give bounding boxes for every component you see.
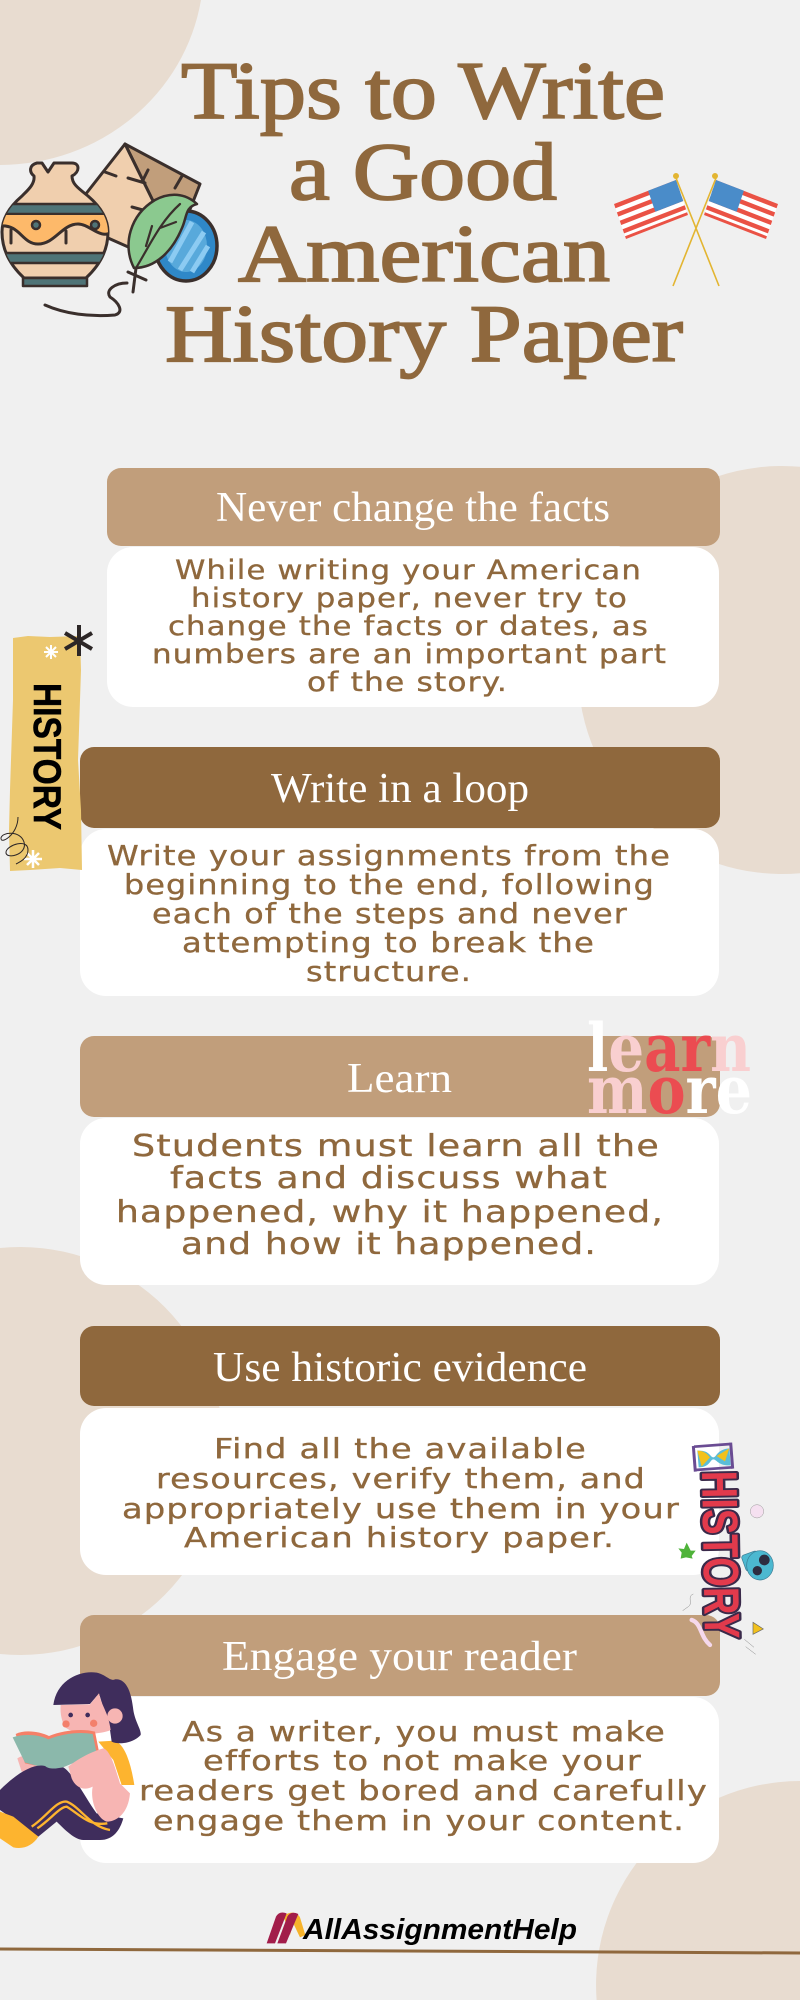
title: American — [238, 208, 610, 299]
panel: write in a loop — [80, 747, 720, 996]
heading: use historic evidence: Use historic evidence — [213, 1345, 587, 1391]
panel: use historic evidence — [80, 1326, 720, 1575]
text: write in a loop: structure. — [306, 955, 472, 988]
text: never change the facts: history paper, never try to — [191, 583, 628, 614]
sticker: learn more — [587, 1009, 752, 1129]
sticker: colourful history with hourglass and skull — [678, 1443, 773, 1654]
title — [165, 45, 683, 379]
heading: never change the facts: Never change the facts — [216, 485, 610, 531]
sticker: history tape — [1, 625, 92, 871]
sticker: learn more: more — [587, 1051, 752, 1129]
text: engage your reader: engage them in your content. — [153, 1804, 685, 1837]
text: learn: Students must learn all the — [132, 1129, 660, 1164]
heading: engage your reader: Engage your reader — [222, 1634, 577, 1680]
icon: crossed American flags — [614, 173, 778, 286]
text: never change the facts: While writing your American — [175, 555, 642, 586]
title: Tips to Write — [181, 45, 665, 136]
text: use historic evidence: appropriately use them in your — [122, 1492, 680, 1525]
text: engage your reader — [80, 1697, 719, 1863]
title: History Paper — [165, 288, 683, 379]
text: use historic evidence: resources, verify them, and — [156, 1462, 646, 1495]
text: write in a loop: Write your assignments from the — [107, 839, 671, 872]
text: write in a loop: each of the steps and never — [152, 897, 628, 930]
icon: girl reading a book — [0, 1672, 141, 1848]
logo: AllAssignmentHelp: AllAssignmentHelp — [302, 1914, 577, 1946]
text: write in a loop: beginning to the end, following — [124, 868, 655, 901]
text: never change the facts — [107, 547, 719, 707]
title: a Good — [289, 126, 557, 217]
text: never change the facts: of the story. — [307, 667, 508, 698]
panel: never change the facts — [107, 468, 720, 707]
text: learn: happened, why it happened, — [116, 1195, 664, 1230]
text: write in a loop — [80, 829, 719, 996]
text: learn — [80, 1118, 719, 1285]
text: write in a loop: attempting to break the — [182, 926, 595, 959]
text: use historic evidence — [80, 1408, 719, 1575]
text: use historic evidence: American history paper. — [184, 1521, 615, 1554]
sticker: history tape: HISTORY — [25, 683, 68, 830]
text: engage your reader: efforts to not make your — [203, 1744, 642, 1777]
panel: engage your reader — [80, 1615, 720, 1863]
heading: write in a loop: Write in a loop — [271, 766, 529, 812]
heading: learn — [80, 1036, 720, 1117]
text: never change the facts: numbers are an important part — [152, 639, 667, 670]
heading: write in a loop — [80, 747, 720, 828]
heading: never change the facts — [107, 468, 720, 546]
heading: learn: Learn — [347, 1056, 452, 1102]
icon: vase, pyramid, feather and shield — [0, 144, 217, 316]
text: engage your reader: readers get bored and carefully — [139, 1774, 708, 1807]
panel: learn — [80, 1036, 720, 1285]
text: use historic evidence: Find all the available — [214, 1432, 587, 1465]
sticker: learn more: learn — [587, 1009, 751, 1087]
heading: engage your reader — [80, 1615, 720, 1696]
text: learn: facts and discuss what — [170, 1161, 608, 1196]
text: learn: and how it happened. — [181, 1227, 597, 1262]
text: engage your reader: As a writer, you must make — [182, 1715, 666, 1748]
sticker: colourful history with hourglass and skull: HISTORY — [691, 1470, 750, 1639]
heading: use historic evidence — [80, 1326, 720, 1406]
text: never change the facts: change the facts or dates, as — [168, 611, 649, 642]
